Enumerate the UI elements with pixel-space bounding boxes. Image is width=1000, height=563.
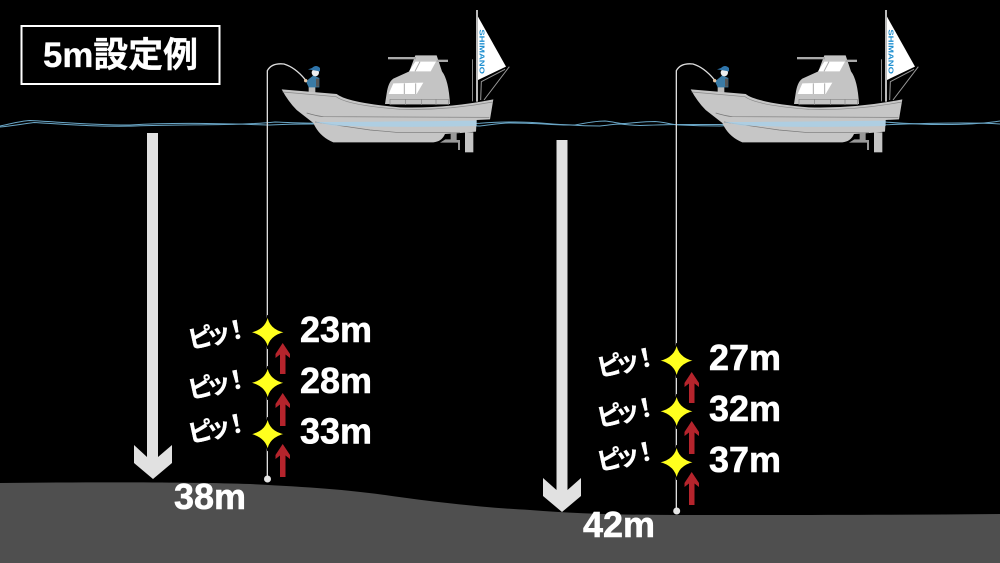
left line end marker	[264, 476, 271, 482]
left sequence: alerts, arrows, depths	[174, 309, 372, 517]
red arrow 2	[276, 393, 290, 426]
alert text 2: ピッ！	[594, 393, 661, 433]
fishing line and rod	[676, 64, 714, 511]
red arrow 2	[684, 421, 699, 454]
star 33m	[250, 417, 285, 451]
right line end marker	[673, 508, 680, 514]
hull	[282, 89, 493, 142]
star 27m	[659, 343, 694, 378]
angler	[304, 66, 320, 93]
seabed	[0, 482, 1000, 563]
red arrow 3	[276, 444, 290, 477]
star 28m	[250, 366, 285, 400]
title box	[22, 26, 220, 84]
mast and flag	[881, 10, 918, 102]
star 23m	[250, 315, 285, 349]
angler	[713, 66, 729, 93]
alert text 1: ピッ！	[185, 315, 252, 355]
right sequence: alerts, arrows, depths	[583, 337, 781, 545]
hull	[691, 89, 902, 142]
outboard motor	[440, 132, 473, 152]
red arrow 3	[684, 472, 699, 505]
left boat with angler	[267, 10, 509, 479]
star 37m	[659, 445, 694, 480]
depth 27m: 27m	[709, 337, 781, 378]
alert text 1: ピッ！	[594, 343, 661, 383]
depth 38m: 38m	[174, 476, 246, 517]
red arrow 1	[684, 372, 699, 403]
left descent arrow	[134, 133, 172, 479]
cabin	[385, 55, 450, 105]
depth 42m: 42m	[583, 504, 655, 545]
fishing line and rod	[267, 64, 305, 479]
alert text 2: ピッ！	[185, 365, 252, 405]
mast and flag	[472, 10, 509, 102]
depth 33m: 33m	[300, 410, 372, 452]
title box: 5m設定例	[43, 36, 198, 75]
alert text 3: ピッ！	[594, 437, 661, 477]
alert text 3: ピッ！	[185, 409, 252, 449]
mast and flag: SHIMANO	[887, 29, 896, 74]
star 32m	[659, 394, 694, 429]
mast and flag: SHIMANO	[478, 29, 487, 74]
red arrow 1	[276, 343, 290, 374]
depth 28m: 28m	[300, 360, 372, 401]
right boat with angler	[676, 10, 918, 511]
right descent arrow	[543, 140, 581, 512]
depth 32m: 32m	[709, 388, 781, 429]
depth 23m: 23m	[300, 309, 372, 350]
depth 37m: 37m	[709, 439, 781, 480]
cabin	[794, 55, 859, 105]
outboard motor	[849, 132, 882, 152]
water surface	[0, 120, 1000, 127]
